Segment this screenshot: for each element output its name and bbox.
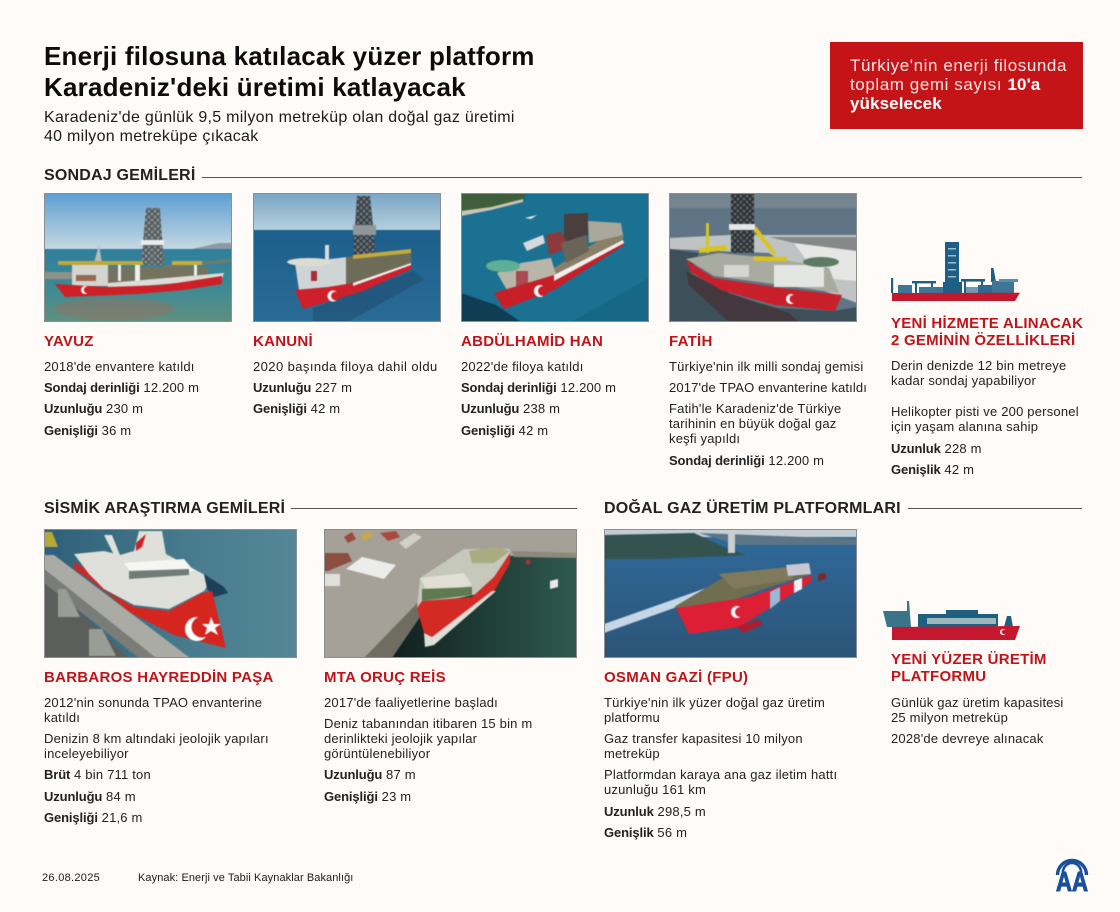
icon: new floating platform ship [883,601,1020,640]
section heading: seismic ships: SİSMİK ARAŞTIRMA GEMİLERİ [44,500,285,517]
details: Sondaj derinliği 12.200 m [461,380,616,395]
details: derinlikteki jeolojik yapılar [324,731,477,746]
name: YAVUZ [44,332,94,350]
name: MTA ORUÇ REİS [324,668,446,686]
panel: Fatih [669,193,867,468]
details: Uzunluk 228 m [891,440,982,456]
title: Enerji filosuna katılacak yüzer platform [44,41,535,71]
subtitle: 40 milyon metreküpe çıkacak [44,128,258,145]
panel: Yavuz [44,193,232,438]
details: 2017'de TPAO envanterine katıldı [669,380,867,395]
details [44,694,269,825]
heading: YENİ YÜZER ÜRETİM [891,651,1047,668]
photo: Abdülhamid Han ship [461,193,649,322]
details: için yaşam alanına sahip [891,419,1038,434]
details: Genişliği 23 m [324,789,411,804]
photo: Oruç Reis ship [324,529,577,658]
panel: Kanuni [253,193,441,416]
title [44,41,535,102]
panel: Osman Gazi [604,529,857,840]
panel: Abdülhamid Han [461,193,649,438]
panel: MTA Oruç Reis [324,529,577,804]
details: görüntülenebiliyor [324,746,430,761]
details: kadar sondaj yapabiliyor [891,373,1036,388]
name: OSMAN GAZİ (FPU) [604,668,748,686]
details: platformu [604,710,660,724]
photo: Barbaros ship [44,529,297,658]
details: Denizin 8 km altındaki jeolojik yapıları [44,731,269,746]
details: 2020 başında filoya dahil oldu [253,358,438,374]
name: BARBAROS HAYREDDİN PAŞA [44,668,274,686]
callout: fleet total: toplam gemi sayısı 10'a [850,75,1040,94]
details: keşfi yapıldı [669,431,740,446]
icon: drill ship [891,242,1020,301]
callout: fleet total: yükselecek [850,94,942,113]
details [324,694,532,804]
details: Uzunluğu 84 m [44,789,136,804]
callout: fleet total [830,42,1083,129]
panel: new floating platform [891,651,1064,746]
details: Genişliği 21,6 m [44,810,143,825]
details [891,694,1064,746]
details: inceleyebiliyor [44,746,129,761]
title: Karadeniz'deki üretimi katlayacak [44,72,466,102]
panel: Barbaros Hayreddin Paşa [44,529,297,825]
callout: fleet total: Türkiye'nin enerji filosunda [850,56,1067,75]
details: Genişliği 42 m [253,401,340,416]
details: Gaz transfer kapasitesi 10 milyon [604,731,803,746]
heading: 2 GEMİNİN ÖZELLİKLERİ [891,332,1075,349]
heading: YENİ HİZMETE ALINACAK [891,315,1083,332]
heading: PLATFORMU [891,668,986,685]
details [891,358,1079,477]
details: katıldı [44,710,80,724]
photo: Osman Gazi FPU [604,529,857,658]
details: 2012'nin sonunda TPAO envanterine [44,694,262,710]
details: Uzunluğu 238 m [461,401,560,416]
panel: new drilling ships features [891,242,1083,477]
details: Genişliği 42 m [461,423,548,438]
details: 2028'de devreye alınacak [891,731,1044,746]
details: Genişliği 36 m [44,423,131,438]
details: Sondaj derinliği 12.200 m [669,453,824,468]
heading [891,651,1047,685]
details: uzunluğu 161 km [604,782,706,797]
details: Fatih'le Karadeniz'de Türkiye [669,401,841,416]
heading [891,315,1083,349]
details: tarihinin en büyük doğal gaz [669,416,836,431]
details [669,358,867,468]
details [461,358,616,438]
details: Uzunluk 298,5 m [604,804,706,819]
section heading: gas platforms: DOĞAL GAZ ÜRETİM PLATFORMLARI [604,500,901,517]
details [44,358,199,438]
details: Deniz tabanından itibaren 15 bin m [324,716,532,731]
details: 2018'de envantere katıldı [44,358,195,374]
photo: Yavuz ship [44,193,232,322]
details: Uzunluğu 87 m [324,767,416,782]
section heading: drilling ships: SONDAJ GEMİLERİ [44,167,195,184]
photo: Kanuni ship [253,193,441,322]
details: Genişlik 42 m [891,462,974,477]
details: 2022'de filoya katıldı [461,358,584,374]
details: Günlük gaz üretim kapasitesi [891,694,1064,710]
subtitle [44,109,515,145]
details: Derin denizde 12 bin metreye [891,358,1066,373]
details [253,358,438,416]
details: Uzunluğu 230 m [44,401,143,416]
name: FATİH [669,332,713,350]
details: Türkiye'nin ilk yüzer doğal gaz üretim [604,694,825,710]
details [604,694,837,840]
details: Sondaj derinliği 12.200 m [44,380,199,395]
details: Platformdan karaya ana gaz iletim hattı [604,767,837,782]
footer source: Kaynak: Enerji ve Tabii Kaynaklar Bakanlığı [138,872,353,884]
name: KANUNİ [253,332,313,350]
name: ABDÜLHAMİD HAN [461,332,603,350]
subtitle: Karadeniz'de günlük 9,5 milyon metreküp olan doğal gaz üretimi [44,109,515,126]
details: Helikopter pisti ve 200 personel [891,404,1079,419]
details: 2017'de faaliyetlerine başladı [324,694,498,710]
details: 25 milyon metreküp [891,710,1008,724]
details: metreküp [604,746,660,761]
details: Genişlik 56 m [604,825,687,840]
details: Brüt 4 bin 711 ton [44,767,151,782]
footer date: 26.08.2025 [42,872,100,884]
details: Türkiye'nin ilk milli sondaj gemisi [669,358,863,374]
details: Uzunluğu 227 m [253,380,352,395]
photo: Fatih ship [669,193,857,322]
